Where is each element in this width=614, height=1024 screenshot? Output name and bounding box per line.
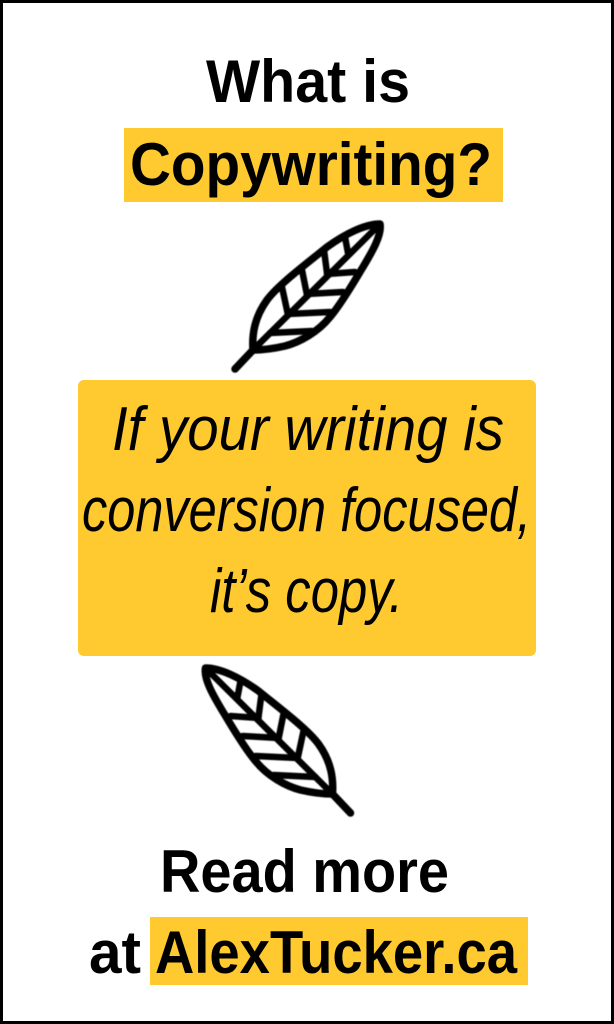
icon: top feather (235, 224, 380, 369)
quote text (82, 395, 531, 626)
call to action (89, 838, 528, 986)
title line: What is: What is (206, 48, 410, 115)
quote text: it’s copy. (210, 557, 403, 626)
icon: bottom feather (205, 668, 350, 813)
highlight: Copywriting: Copywriting? (130, 131, 492, 198)
quote text: If your writing is (112, 395, 504, 464)
title (124, 48, 503, 202)
cta line: Read more: Read more (160, 838, 449, 905)
highlight: AlexTucker.ca: AlexTucker.ca (155, 919, 518, 986)
cta word: at: at (89, 919, 141, 986)
panel: quote (78, 380, 536, 656)
